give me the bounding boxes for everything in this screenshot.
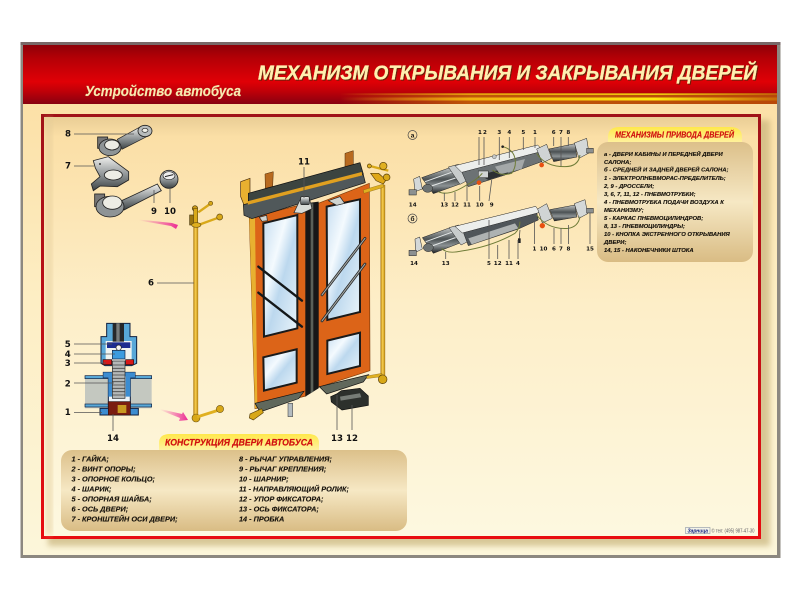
parts list box [61, 450, 407, 531]
labels: mechanism b numbers: 15 [586, 246, 594, 252]
labels: mechanism b numbers: 12 [494, 261, 502, 267]
labels: mechanism a numbers: 6 [552, 130, 556, 136]
roller brackets [294, 198, 312, 213]
labels: mechanism a numbers [409, 130, 570, 208]
legend text [603, 150, 731, 254]
labels: section numbers: 1 [65, 408, 71, 418]
title: МЕХАНИЗМ ОТКРЫВАНИЯ И ЗАКРЫВАНИЯ ДВЕРЕЙ [258, 60, 758, 84]
labels: mechanism a numbers: 11 [463, 202, 471, 208]
label: 11: 11 [298, 158, 310, 168]
label: 7: 7 [65, 162, 71, 172]
parts list: column 2: 9 - РЫЧАГ КРЕПЛЕНИЯ; [239, 464, 327, 474]
upper stubs [241, 151, 353, 205]
legend text: САЛОНА; [604, 160, 631, 166]
door panel: right leaf [318, 183, 370, 387]
icon: door axis [190, 201, 224, 422]
guide rail [243, 163, 365, 219]
heading tab [159, 434, 319, 450]
callout: mechanism a marker [408, 130, 417, 140]
labels: mechanism a numbers: 14 [409, 202, 417, 208]
labels: mechanism a numbers: 3 [497, 130, 501, 136]
label: 6: 6 [148, 278, 154, 288]
legend text: 1 - ЭЛЕКТРОПНЕВМОРАС-ПРЕДЕЛИТЕЛЬ; [604, 176, 726, 182]
labels: section numbers: 5 [65, 340, 71, 350]
label: 7 [65, 162, 94, 172]
labels: mechanism b numbers: 6 [552, 246, 556, 252]
icon: mechanism b [409, 200, 593, 256]
labels: 13 and 12: 12 [346, 434, 358, 444]
right axis [363, 162, 390, 384]
labels: section numbers: 2 [65, 380, 71, 390]
parts list: column 2: 14 - ПРОБКА [239, 514, 284, 524]
labels: 9 and 10 [151, 188, 176, 217]
parts list: column 2 [239, 454, 349, 524]
legend text: 8, 13 - ПНЕВМОЦИЛИНДРЫ; [604, 224, 685, 230]
label: 8 [65, 130, 134, 140]
legend text: 4 - ПНЕВМОТРУБКА ПОДАЧИ ВОЗДУХА К [603, 200, 724, 206]
fixator [331, 388, 368, 410]
labels: mechanism a numbers: 9 [490, 202, 494, 208]
legend text: 14, 15 - НАКОНЕЧНИКИ ШТОКА [604, 248, 694, 254]
parts list: column 1: 6 - ОСЬ ДВЕРИ; [72, 504, 129, 514]
parts list: column 1: 4 - ШАРИК; [70, 484, 112, 494]
labels: mechanism a numbers: 13 [440, 202, 448, 208]
labels: 13 and 12 [331, 395, 358, 444]
icon: part 7 door axis bracket [91, 157, 129, 191]
publisher imprint: Зарница [688, 528, 708, 534]
labels: mechanism b numbers: 1 [533, 246, 537, 252]
parts list: column 2: 8 - РЫЧАГ УПРАВЛЕНИЯ; [239, 454, 333, 464]
panel: door construction [61, 434, 407, 531]
header banner [23, 45, 777, 104]
subtitle: Устройство автобуса [85, 84, 241, 100]
labels: mechanism a numbers: 1 [533, 130, 537, 136]
door panel: left leaf [249, 203, 306, 409]
legend text: 2, 9 - ДРОССЕЛИ; [603, 184, 654, 190]
label: 11 [298, 158, 310, 198]
labels: mechanism a numbers: 5 [521, 130, 525, 136]
heading tab: МЕХАНИЗМЫ ПРИВОДА ДВЕРЕЙ [615, 130, 734, 140]
callout: mechanism b marker [408, 214, 417, 223]
legend text: МЕХАНИЗМУ; [604, 208, 644, 214]
publisher imprint [686, 528, 755, 534]
labels: 9 and 10: 9 [151, 207, 157, 217]
legend text: а - ДВЕРИ КАБИНЫ И ПЕРЕДНЕЙ ДВЕРИ [604, 150, 723, 158]
labels: mechanism b numbers: 7 [559, 246, 563, 252]
labels: mechanism b numbers: 13 [442, 261, 450, 267]
labels: 13 and 12: 13 [331, 434, 343, 444]
labels: mechanism a numbers: 2 [483, 130, 487, 136]
labels: 9 and 10: 10 [164, 207, 176, 217]
labels: mechanism b numbers: 4 [516, 261, 520, 267]
publisher imprint: © тел: (495) 987-47-30 [712, 528, 755, 534]
labels: section numbers [65, 340, 119, 444]
labels: mechanism b numbers: 8 [567, 246, 571, 252]
parts list: column 1 [70, 454, 178, 524]
arrow: top pink [139, 220, 178, 229]
label: 8: 8 [65, 130, 71, 140]
icon: door axis support section [85, 323, 152, 415]
parts list: column 2: 12 - УПОР ФИКСАТОРА; [239, 494, 324, 504]
labels: mechanism b numbers: 14 [410, 261, 418, 267]
door rods: left [258, 267, 302, 327]
heading tab [608, 127, 742, 143]
icon: mechanism a [409, 138, 593, 195]
labels: mechanism b numbers: 5 [487, 261, 491, 267]
callout: mechanism b marker: б [410, 215, 415, 223]
door seal: centre [305, 202, 319, 397]
parts list: column 2: 10 - ШАРНИР; [239, 474, 289, 484]
labels: mechanism a numbers: 12 [451, 202, 459, 208]
panel: door drive mechanisms [597, 127, 753, 262]
bottom guides [249, 375, 369, 420]
legend text: ДВЕРИ; [603, 240, 626, 246]
legend box [597, 142, 753, 262]
legend text: 3, 6, 7, 11, 12 - ПНЕВМОТРУБКИ; [604, 192, 696, 198]
icon: part 8 control lever [98, 125, 152, 156]
legend text: 10 - КНОПКА ЭКСТРЕННОГО ОТКРЫВАНИЯ [604, 232, 731, 238]
labels: section numbers: 4 [65, 350, 71, 360]
labels: section numbers: 14 [107, 434, 119, 444]
labels: mechanism a numbers: 4 [507, 130, 511, 136]
labels: mechanism a numbers: 10 [476, 202, 484, 208]
labels: mechanism a numbers: 7 [559, 130, 563, 136]
icon: parts 9 and 10 mounting lever with hinge [95, 170, 178, 217]
labels: mechanism b numbers: 11 [505, 261, 513, 267]
callout: mechanism a marker: а [411, 132, 415, 139]
parts list: column 1: 2 - ВИНТ ОПОРЫ; [70, 464, 136, 474]
inner frame [42, 116, 770, 546]
label: 6 [148, 278, 194, 288]
legend text: 5 - КАРКАС ПНЕВМОЦИЛИНДРОВ; [604, 216, 703, 222]
labels: mechanism b numbers [410, 213, 594, 267]
arrow: bottom pink [160, 409, 188, 421]
parts list: column 1: 3 - ОПОРНОЕ КОЛЬЦО; [72, 474, 155, 484]
labels: mechanism a numbers: 1 [478, 130, 482, 136]
parts list: column 1: 5 - ОПОРНАЯ ШАЙБА; [72, 494, 152, 504]
parts list: column 2: 13 - ОСЬ ФИКСАТОРА; [239, 504, 319, 514]
labels: mechanism a numbers: 8 [566, 130, 570, 136]
parts list: column 1: 1 - ГАЙКА; [72, 454, 109, 464]
door rods: right [322, 238, 365, 321]
labels: mechanism b numbers: 10 [540, 246, 547, 252]
labels: section numbers: 3 [65, 359, 71, 369]
parts list: column 2: 11 - НАПРАВЛЯЮЩИЙ РОЛИК; [239, 484, 349, 494]
parts list: column 1: 7 - КРОНШТЕЙН ОСИ ДВЕРИ; [72, 514, 178, 524]
legend text: б - СРЕДНЕЙ И ЗАДНЕЙ ДВЕРЕЙ САЛОНА; [604, 166, 729, 174]
door assembly [241, 151, 390, 420]
heading tab: КОНСТРУКЦИЯ ДВЕРИ АВТОБУСА [165, 438, 313, 448]
